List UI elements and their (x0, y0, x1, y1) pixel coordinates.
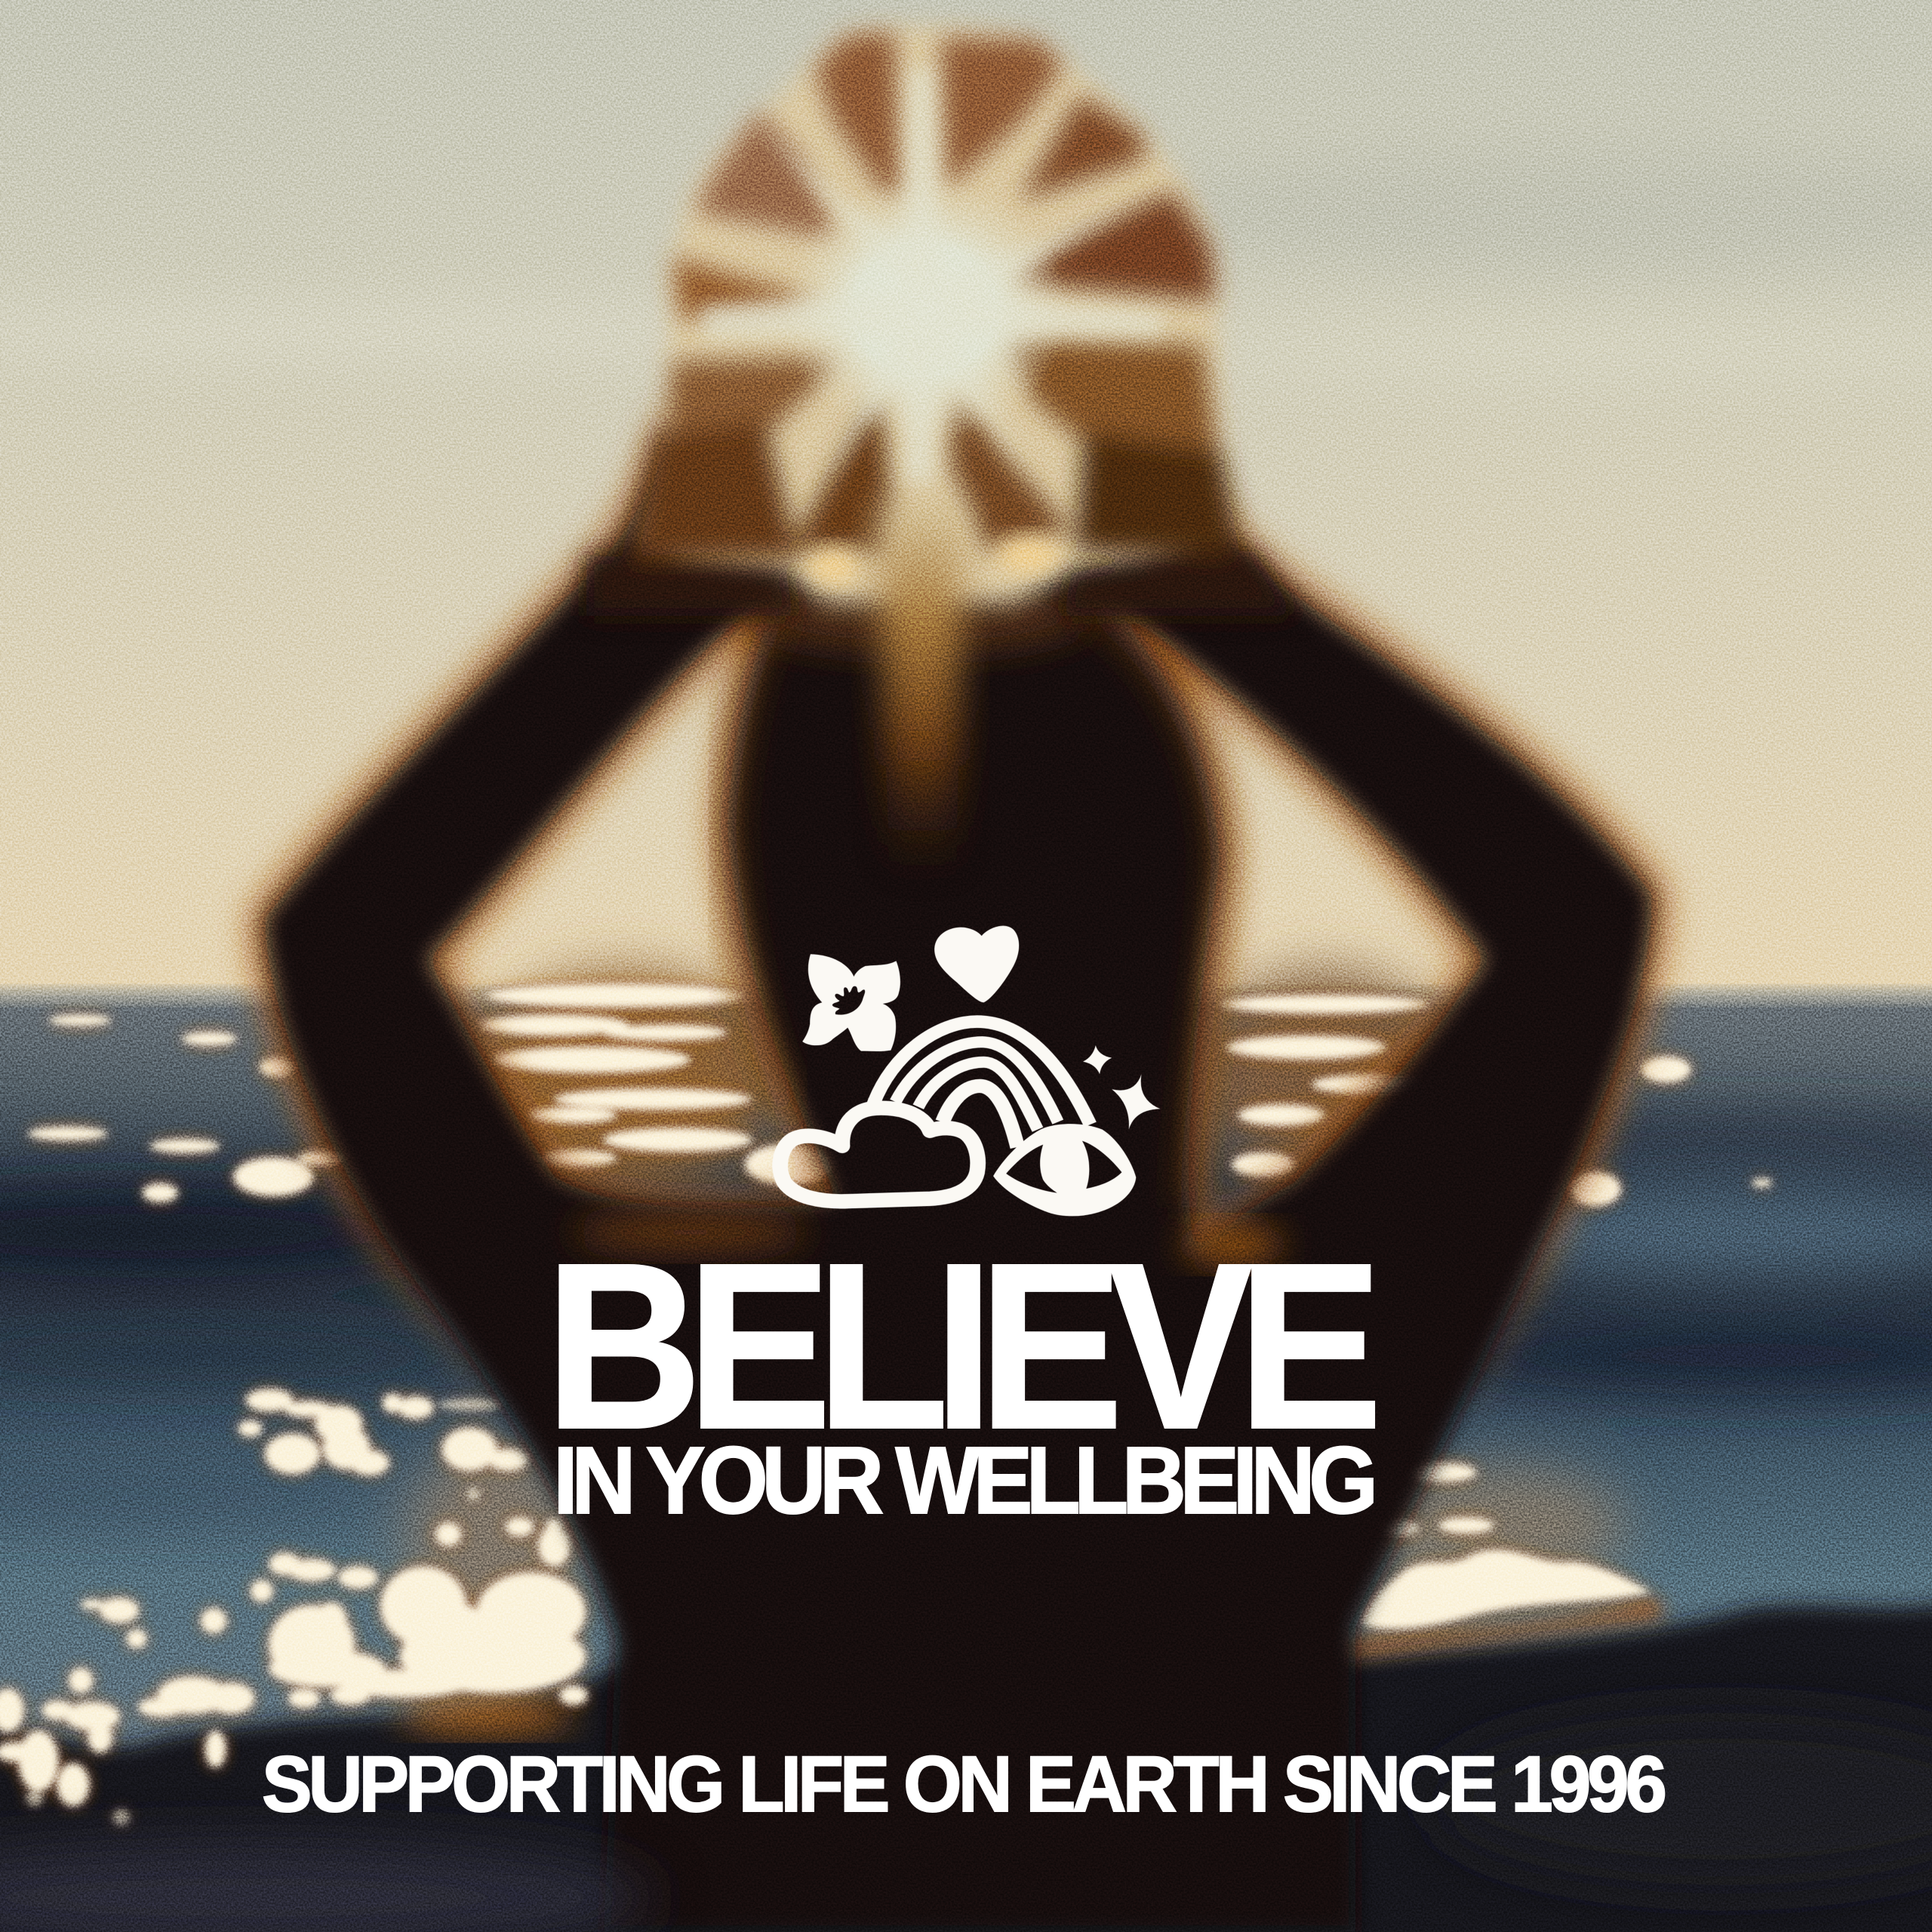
icon: eye (993, 1124, 1136, 1216)
sea (0, 974, 1932, 1932)
icon: small sparkle (1083, 1045, 1112, 1074)
logo icons (780, 926, 1160, 1216)
subheading: in your wellbeing: IN YOUR WELLBEING (553, 1427, 1378, 1534)
head and sunburst (586, 26, 1297, 616)
icon: cloud (780, 1108, 978, 1201)
sky (0, 0, 1932, 1011)
hands brown haze (746, 579, 1091, 653)
hair edge warmth (727, 604, 789, 1109)
sun rays (702, 68, 1162, 483)
heading: believe: BELIEVE (545, 1214, 1383, 1478)
icon: rainbow (873, 1022, 1091, 1147)
sky light bands (0, 148, 1932, 374)
head shadow wedges (586, 32, 1297, 616)
tagline: SUPPORTING LIFE ON EARTH SINCE 1996 (262, 1740, 1667, 1829)
shoulder brown haze (573, 1213, 807, 1252)
icon: flower (802, 954, 900, 1051)
warm haze inside arm gaps (481, 974, 777, 1183)
icon: heart (934, 926, 1019, 1002)
gold light spots (808, 548, 859, 584)
lower corner waves over body edge (0, 1842, 653, 1932)
icon: large sparkle (1112, 1074, 1160, 1130)
water glints (0, 985, 1772, 1825)
sun glow (781, 177, 1068, 441)
head base (643, 26, 1228, 604)
silhouette glow and body (0, 419, 1932, 1932)
foreground dark wave (0, 1597, 1932, 1932)
downward sun ray (877, 505, 964, 875)
